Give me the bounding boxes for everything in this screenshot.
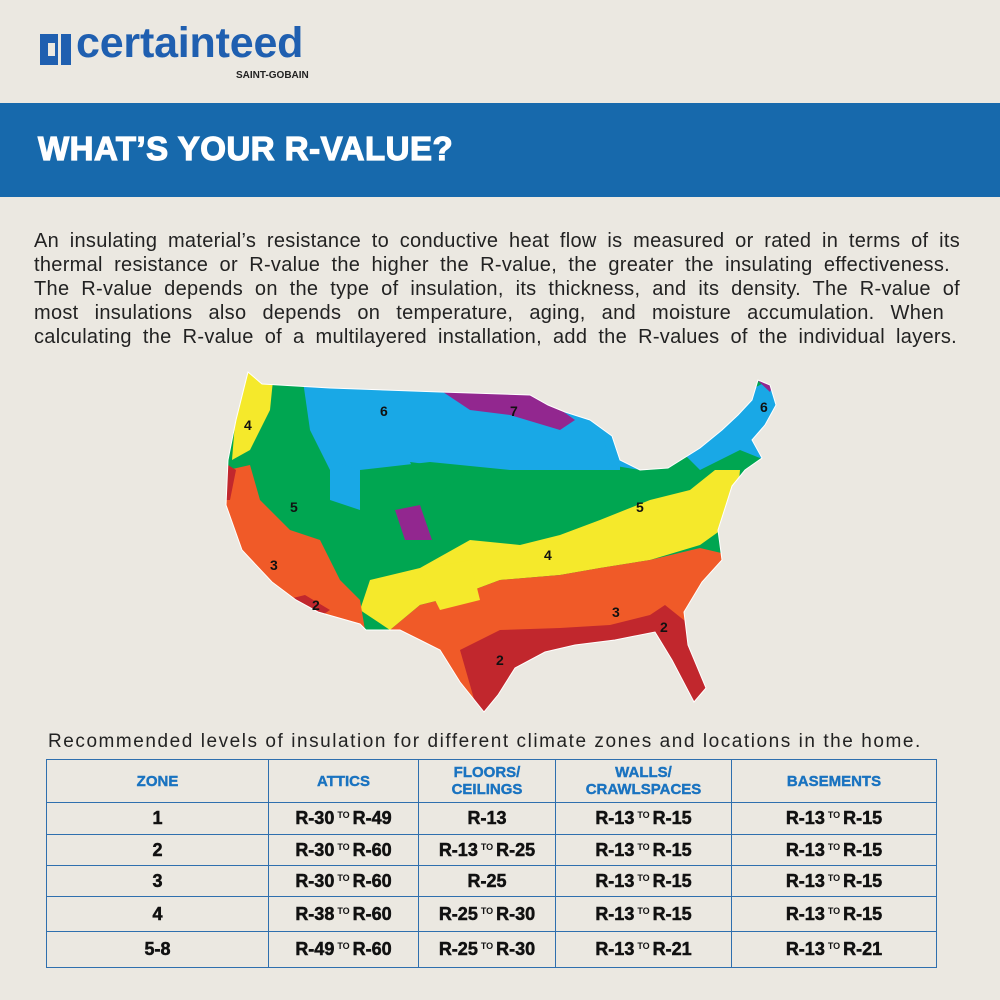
climate zone map: 7 [510, 403, 518, 419]
intro paragraph: calculating the R-value of a multilayered installation, add the R-values of the individual layers. [34, 326, 957, 348]
insulation table: R-25 TOR-30 [439, 904, 535, 924]
insulation table: R-30 TOR-60 [295, 840, 392, 860]
insulation table: R-13 TOR-15 [786, 808, 882, 828]
insulation table: R-13 TOR-21 [786, 939, 882, 959]
climate zone map: 3 [612, 604, 620, 620]
intro paragraph: An insulating material’s resistance to conductive heat flow is measured or rated in terms of its [34, 230, 960, 252]
logo [40, 19, 309, 81]
climate zone map: 6 [380, 403, 388, 419]
insulation table: ZONE [137, 772, 178, 790]
sub brand: SAINT-GOBAIN [236, 70, 309, 81]
insulation table [46, 759, 937, 968]
climate zone map: 4 [544, 547, 552, 563]
climate zone map [226, 371, 776, 712]
climate zone map: 6 [760, 399, 768, 415]
insulation table: 5-8 [144, 939, 170, 959]
insulation table: R-13 TOR-25 [439, 840, 535, 860]
intro paragraph: The R-value depends on the type of insulation, its thickness, and its density. The R-value of [34, 278, 960, 300]
insulation table: 1 [152, 808, 162, 828]
climate zone map: 5 [636, 499, 644, 515]
icon: logo mark [40, 34, 71, 65]
climate zone map: 2 [496, 652, 504, 668]
insulation table: R-13 TOR-15 [595, 904, 692, 924]
insulation table: R-13 [467, 808, 506, 828]
title: WHAT’S YOUR R-VALUE? [38, 130, 453, 167]
brand name: certainteed [76, 19, 303, 67]
climate zone map: 4 [244, 417, 252, 433]
insulation table: R-13 TOR-15 [786, 840, 882, 860]
insulation table: 4 [152, 904, 162, 924]
insulation table: WALLS/ [615, 764, 672, 781]
insulation table: R-25 TOR-30 [439, 939, 535, 959]
insulation table: R-38 TOR-60 [295, 904, 392, 924]
insulation table: R-13 TOR-15 [786, 904, 882, 924]
insulation table: FLOORS/ [454, 764, 520, 781]
intro paragraph: thermal resistance or R-value the higher the R-value, the greater the insulating effectiveness. [34, 254, 950, 276]
insulation table: R-25 [467, 870, 506, 890]
insulation table: 2 [152, 840, 162, 860]
insulation table: R-13 TOR-21 [595, 939, 692, 959]
intro paragraph [34, 230, 960, 348]
climate zone map: 3 [270, 557, 278, 573]
insulation table: R-30 TOR-60 [295, 870, 392, 890]
table caption: Recommended levels of insulation for different climate zones and locations in the home. [48, 731, 922, 752]
climate zone map: 2 [312, 597, 320, 613]
insulation table: CRAWLSPACES [586, 781, 701, 798]
climate zone map: 5 [290, 499, 298, 515]
insulation table: CEILINGS [452, 781, 522, 798]
insulation table: ATTICS [317, 772, 370, 790]
insulation table: 3 [152, 870, 162, 890]
insulation table: BASEMENTS [787, 772, 881, 790]
insulation table: R-13 TOR-15 [595, 840, 692, 860]
insulation table: R-13 TOR-15 [595, 808, 692, 828]
insulation table: R-30 TOR-49 [295, 808, 392, 828]
intro paragraph: most insulations also depends on temperature, aging, and moisture accumulation. When [34, 302, 944, 324]
insulation table: R-13 TOR-15 [786, 870, 882, 890]
insulation table: R-13 TOR-15 [595, 870, 692, 890]
insulation table: R-49 TOR-60 [295, 939, 392, 959]
title banner [0, 103, 1000, 197]
climate zone map: 2 [660, 619, 668, 635]
